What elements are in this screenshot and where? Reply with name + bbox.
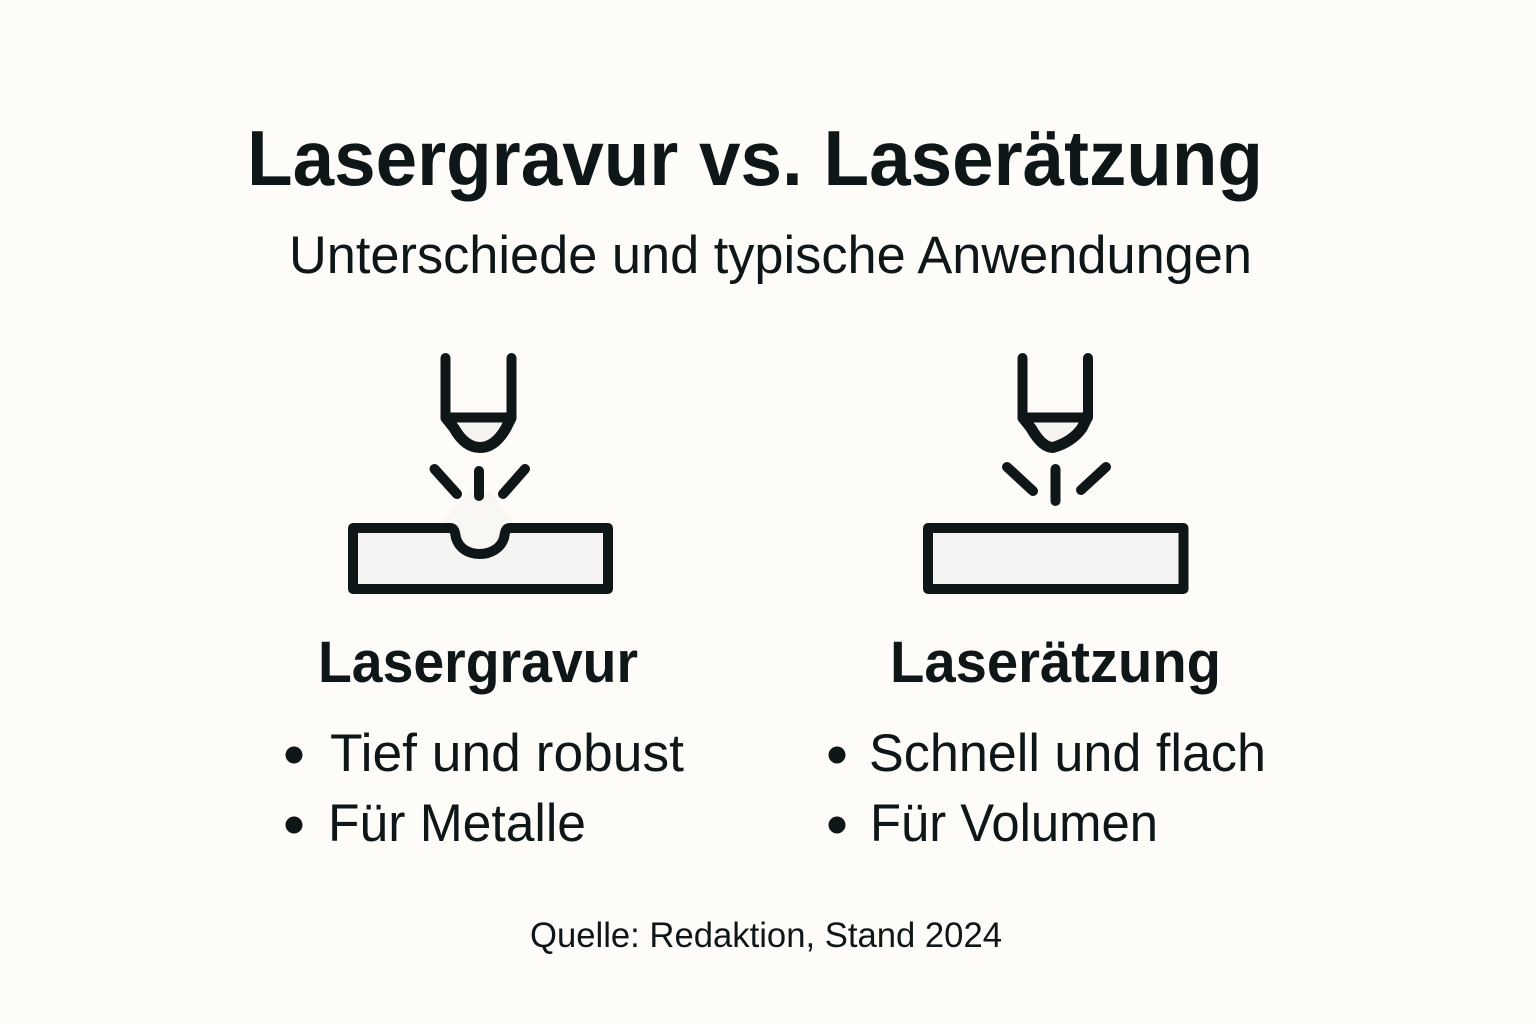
panel: Laserätzung — [828, 358, 1266, 853]
bullet text: Für Volumen — [870, 794, 1158, 853]
subtitle: Unterschiede und typische Anwendungen — [289, 226, 1252, 285]
laser nozzle — [1022, 358, 1088, 448]
bullet text: Tief und robust — [330, 724, 684, 783]
bullet marker — [286, 816, 302, 834]
flat workpiece — [928, 528, 1184, 589]
glow above groove — [440, 492, 514, 552]
bullet marker — [286, 746, 302, 764]
bullet list — [828, 724, 1266, 853]
title: Lasergravur vs. Laserätzung — [247, 114, 1263, 202]
sparks — [434, 469, 525, 496]
bullet marker — [828, 746, 846, 764]
source note: Quelle: Redaktion, Stand 2024 — [530, 916, 1002, 955]
bullet list — [286, 724, 684, 853]
heading: Lasergravur: Lasergravur — [318, 630, 638, 695]
bullet marker — [828, 816, 846, 834]
bullet text: Für Metalle — [328, 794, 586, 853]
workpiece with groove — [353, 528, 608, 589]
panel: Lasergravur — [286, 358, 684, 853]
icon: laser engraving — [353, 358, 608, 589]
bullet text: Schnell und flach — [869, 724, 1266, 783]
heading: Laserätzung: Laserätzung — [890, 630, 1221, 695]
laser nozzle — [446, 358, 512, 448]
sparks — [1007, 467, 1106, 501]
icon: laser etching — [928, 358, 1184, 589]
